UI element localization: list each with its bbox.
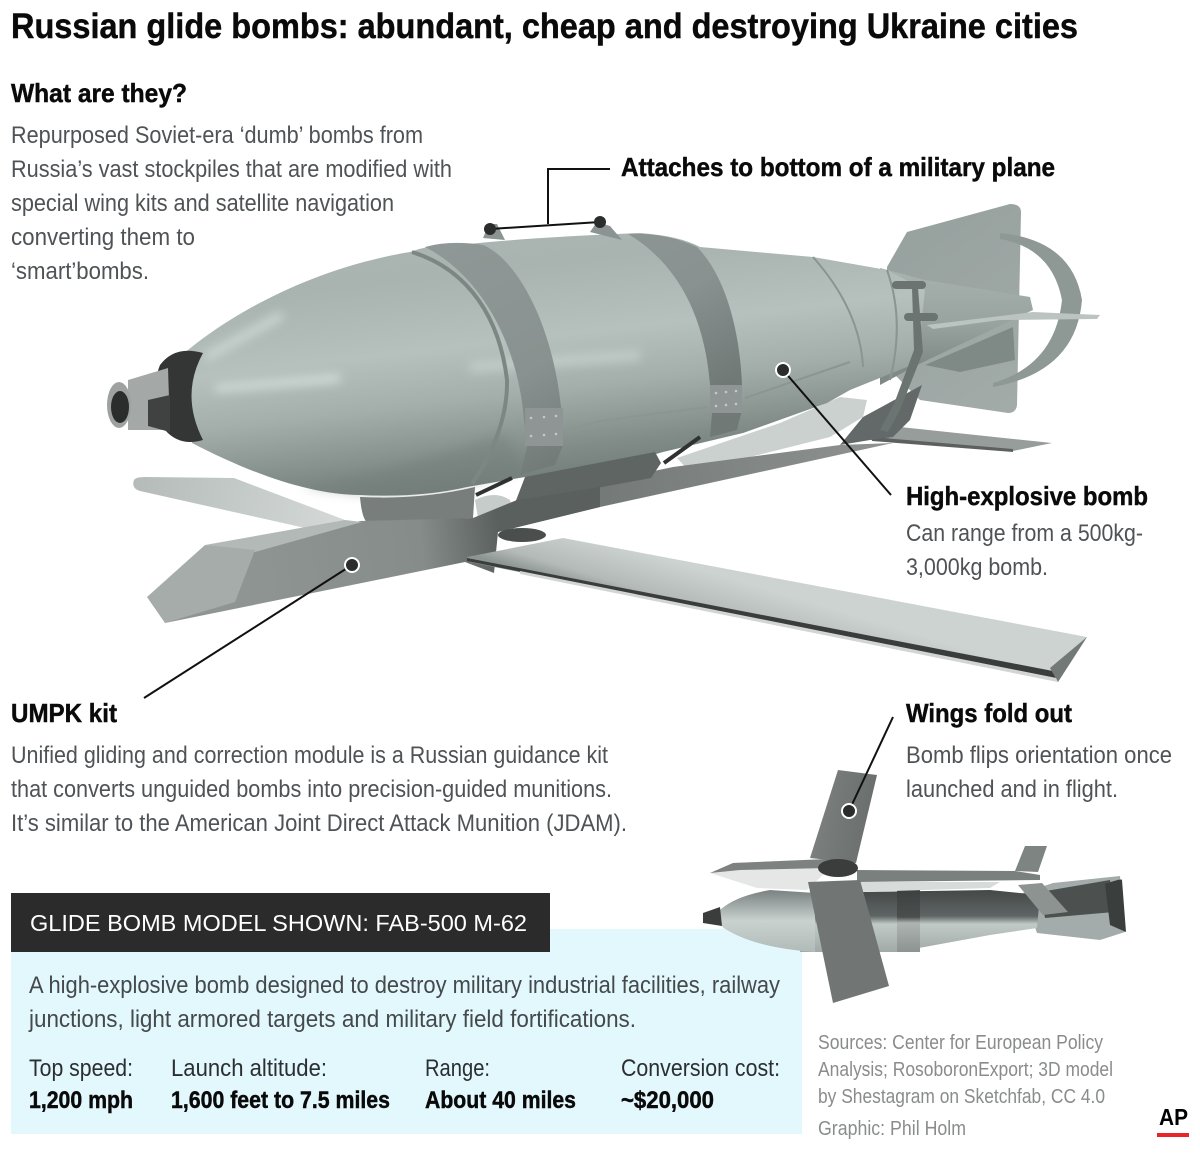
stat: top speed: Top speed: [29, 1055, 133, 1082]
description: what are they: converting them to [11, 224, 195, 251]
label: attachment: Attaches to bottom of a military plane [621, 152, 1055, 182]
callout: attaches to plane [484, 152, 1055, 235]
description: wings: Bomb flips orientation once [906, 742, 1172, 769]
small diagonal fin [1018, 883, 1068, 915]
sources and credit: Sources: Center for European Policy [818, 1032, 1103, 1054]
fuse [703, 907, 722, 926]
small rear fin [1015, 846, 1047, 872]
near front wing and beam [147, 487, 600, 623]
stat: top speed [29, 1055, 133, 1114]
leader: attachment [484, 169, 610, 235]
rear-section seams [813, 257, 897, 380]
forward strap [412, 243, 563, 484]
stat: range: About 40 miles [425, 1087, 576, 1114]
strap [897, 890, 920, 952]
AP logo: AP [1159, 1104, 1188, 1130]
marker and leader: bomb [776, 363, 891, 495]
tail clamp [880, 281, 938, 432]
tail ring [993, 233, 1082, 387]
mounting lugs [483, 222, 622, 240]
tail fin [887, 204, 1021, 413]
description: what are they [11, 122, 452, 285]
pivot [818, 859, 858, 877]
sources and credit: Analysis; RosoboronExport; 3D model [818, 1059, 1113, 1081]
description: UMPK [11, 742, 627, 837]
illustration: main glide bomb [107, 204, 1100, 682]
tail section [1023, 876, 1126, 940]
description: UMPK: Unified gliding and correction module is a Russian guidance kit [11, 742, 608, 769]
bottom wing [808, 880, 889, 1003]
sources and credit: by Shestagram on Sketchfab, CC 4.0 [818, 1086, 1105, 1108]
stat: launch altitude [171, 1055, 390, 1114]
description: UMPK: that converts unguided bombs into precision-guided munitions. [11, 776, 612, 803]
heading: what are they: What are they? [11, 78, 187, 108]
description: what are they: ‘smart’bombs. [11, 258, 149, 285]
bomb body and nose [180, 233, 925, 496]
sources and credit: Graphic: Phil Holm [818, 1118, 966, 1140]
fuse [107, 351, 203, 442]
label: UMPK: UMPK kit [11, 698, 117, 728]
stat: range [425, 1055, 576, 1114]
model description: A high-explosive bomb designed to destroy military industrial facilities, railway [29, 972, 780, 999]
under-body brackets [360, 437, 700, 523]
model description [28, 972, 780, 1033]
description: wings: launched and in flight. [906, 776, 1118, 803]
label: bomb: High-explosive bomb [906, 481, 1148, 511]
info panel: FAB-500 M-62 [11, 893, 802, 1134]
model description: junctions, light armored targets and military field fortifications. [28, 1006, 636, 1033]
description: UMPK: It’s similar to the American Joint Direct Attack Munition (JDAM). [11, 810, 627, 837]
stat: range: Range: [425, 1055, 490, 1082]
guide rail [498, 385, 922, 532]
description: wings [906, 742, 1172, 803]
label: wings: Wings fold out [906, 698, 1072, 728]
model header [11, 893, 550, 952]
sources and credit [818, 1032, 1113, 1140]
description: what are they: Russia’s vast stockpiles that are modified with [11, 156, 452, 183]
stat: launch altitude: Launch altitude: [171, 1055, 327, 1082]
far left wing [133, 477, 353, 530]
marker and leader: wings [842, 717, 893, 818]
panel background [11, 929, 802, 1134]
horizontal tail fin [927, 312, 1100, 329]
rail [857, 870, 1040, 882]
stat: top speed: 1,200 mph [29, 1087, 133, 1114]
bomb body [800, 890, 1040, 952]
marker and leader: UMPK [144, 558, 359, 698]
stat: conversion cost [621, 1055, 780, 1114]
callout: wings fold out [842, 698, 1172, 818]
stat: conversion cost: Conversion cost: [621, 1055, 780, 1082]
description: bomb: Can range from a 500kg- [906, 520, 1143, 547]
text block: what are they [11, 78, 452, 285]
top wing [810, 770, 877, 863]
body seam [525, 362, 850, 440]
description: what are they: special wing kits and satellite navigation [11, 190, 394, 217]
stat: launch altitude: 1,600 feet to 7.5 miles [171, 1087, 390, 1114]
body lower shade [300, 433, 523, 496]
callout: UMPK kit [11, 558, 627, 837]
description: bomb [906, 520, 1143, 581]
tail cone [880, 268, 1033, 385]
far right small wing [870, 427, 1052, 451]
description: what are they: Repurposed Soviet-era ‘dumb’ bombs from [11, 122, 423, 149]
nose highlights [203, 312, 640, 392]
model header: GLIDE BOMB MODEL SHOWN: FAB-500 M-62 [30, 910, 527, 936]
title: Russian glide bombs: abundant, cheap and destroying Ukraine cities [11, 7, 1078, 46]
callout: high-explosive bomb [776, 363, 1148, 581]
illustration: bomb in flight with wings out [703, 770, 1126, 1003]
description: bomb: 3,000kg bomb. [906, 554, 1048, 581]
bomb nose [719, 890, 815, 952]
rear strap [628, 234, 742, 437]
pivot [498, 528, 546, 542]
left fin [710, 859, 828, 890]
near right wing [467, 538, 1087, 682]
stat: conversion cost: ~$20,000 [621, 1087, 714, 1114]
